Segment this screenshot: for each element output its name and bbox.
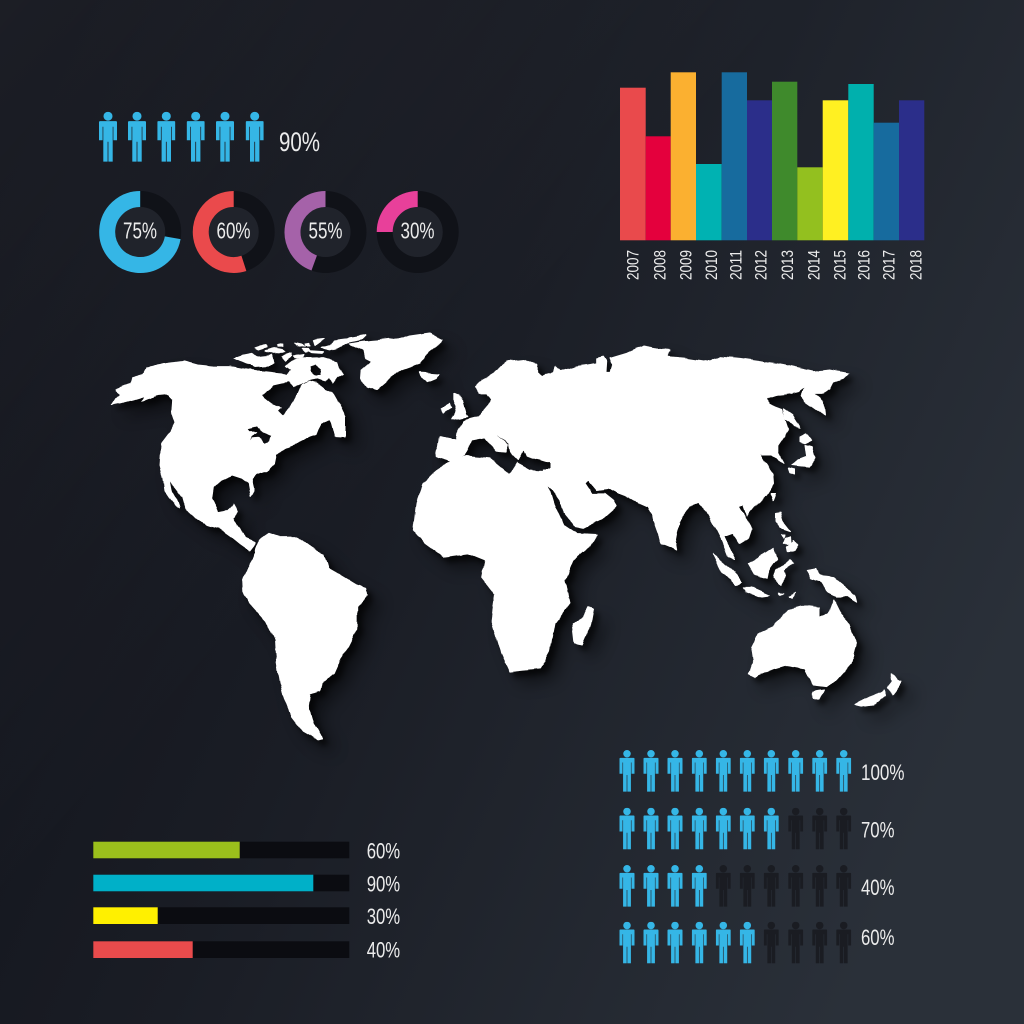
Japan and Sakhalin (783, 409, 815, 475)
year labels: 2008 (651, 250, 669, 280)
donut 30% (385, 199, 451, 265)
Arctic islands (233, 335, 366, 366)
donut 75%: 75% (123, 218, 157, 244)
year labels: 2016 (855, 250, 873, 280)
Britain and Ireland (441, 393, 468, 419)
year labels: 2011 (727, 250, 745, 280)
Eurasia (437, 346, 848, 560)
year labels: 2015 (831, 250, 849, 280)
year labels: 2017 (881, 250, 899, 280)
New Zealand (855, 673, 902, 707)
Southeast Asian islands (713, 494, 797, 598)
donut 55%: 55% (308, 218, 342, 244)
bar 40% (93, 938, 400, 963)
row 40%: 40% (861, 875, 894, 900)
year labels (624, 250, 925, 280)
bar 30% (93, 904, 400, 929)
label: 90%: 90% (279, 127, 320, 157)
year labels: 2014 (806, 250, 824, 280)
row 60%: 60% (861, 925, 894, 950)
donut 55% (292, 199, 358, 265)
people grid (620, 750, 904, 963)
bar 60% (93, 838, 400, 863)
year labels: 2012 (752, 250, 770, 280)
year labels: 2018 (907, 250, 925, 280)
year labels: 2007 (624, 250, 642, 280)
donut 60%: 60% (216, 218, 250, 244)
North America (112, 358, 345, 550)
year labels: 2013 (779, 250, 797, 280)
bar 40%: 40% (367, 938, 400, 963)
row 70%: 70% (861, 818, 894, 843)
row 70% (620, 808, 894, 849)
world map (112, 334, 902, 739)
New Guinea (807, 568, 857, 602)
South America (243, 533, 368, 739)
bar 30%: 30% (367, 904, 400, 929)
year labels: 2010 (703, 250, 721, 280)
Iceland (419, 373, 440, 382)
row 60% (620, 922, 894, 963)
Greenland (349, 334, 443, 390)
row 100%: 100% (861, 760, 904, 785)
year labels: 2009 (677, 250, 695, 280)
Old World and Oceania (413, 346, 902, 707)
donut 75% (107, 199, 173, 265)
Americas and Greenland (112, 334, 443, 739)
bar chart 2007-2018 (620, 72, 925, 280)
row 40% (620, 865, 894, 907)
bar 90% (93, 872, 400, 896)
bar 60%: 60% (367, 838, 400, 863)
progress bars (93, 838, 400, 963)
donut charts (107, 199, 451, 265)
Australia and Tasmania (748, 600, 857, 700)
bar 90%: 90% (367, 872, 400, 896)
Africa (413, 456, 597, 672)
donut 30%: 30% (400, 218, 434, 244)
Madagascar (573, 607, 594, 645)
row 100% (620, 750, 904, 792)
people row 90% (99, 112, 264, 162)
donut 60% (201, 199, 267, 265)
